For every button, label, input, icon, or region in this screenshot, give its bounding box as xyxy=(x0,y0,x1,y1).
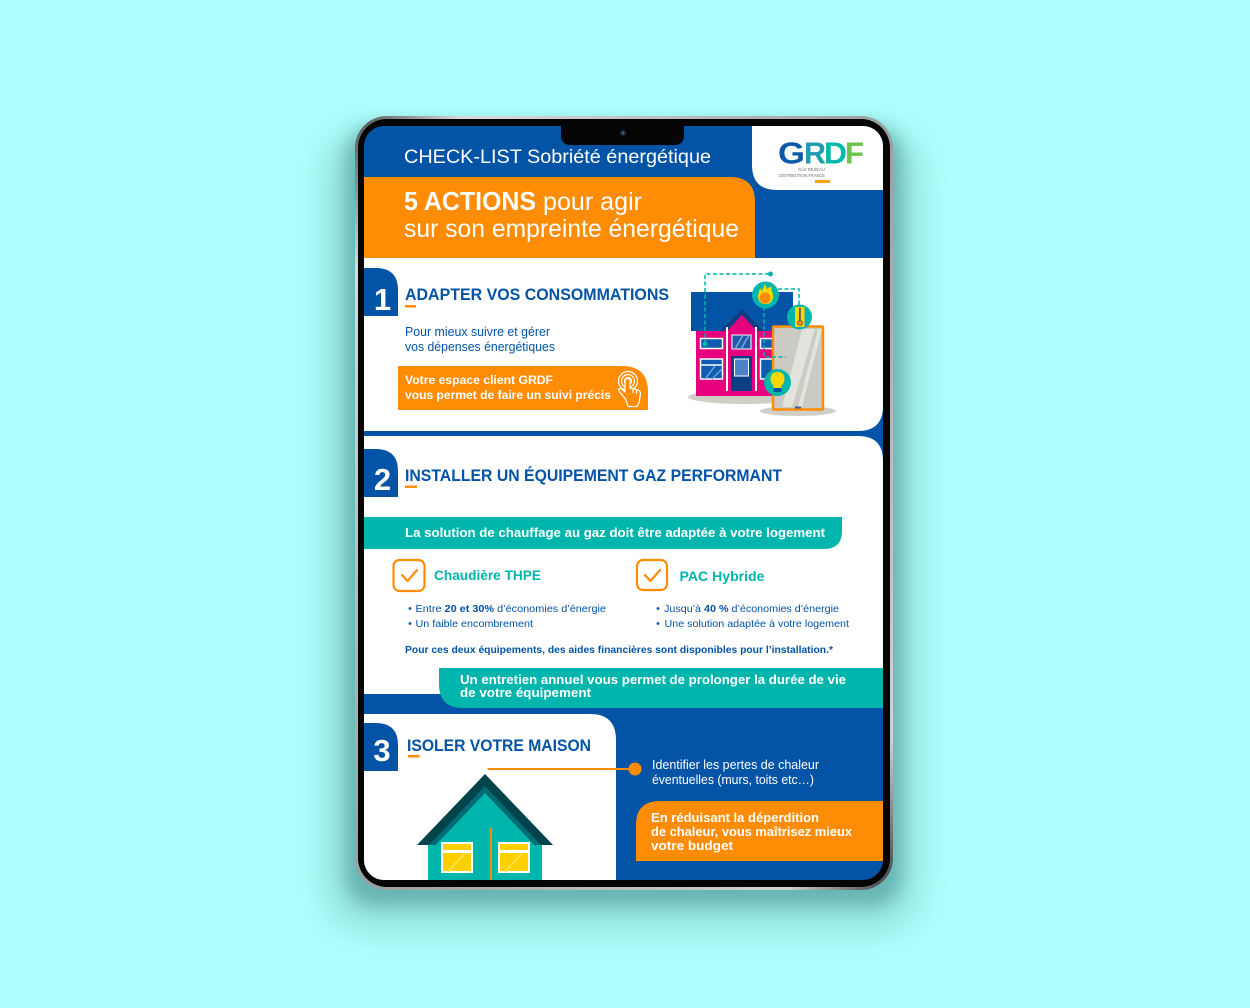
GRDF logo: DISTRIBUTION FRANCE xyxy=(779,173,825,178)
teal band xyxy=(364,517,842,549)
number tab 3 xyxy=(364,723,398,771)
GRDF logo: D xyxy=(824,136,847,170)
number tab 1: 1 xyxy=(374,282,391,317)
icon: check box xyxy=(394,560,424,591)
number tab 3: 3 xyxy=(373,733,391,768)
window left xyxy=(442,843,472,872)
GRDF logo: R xyxy=(804,136,826,170)
financial aid note: Pour ces deux équipements, des aides financières sont disponibles pour l’installation.* xyxy=(405,644,834,656)
section 2 xyxy=(364,436,883,708)
description 1: vos dépenses énergétiques xyxy=(405,340,555,354)
option: Chaudière THPE: Chaudière THPE xyxy=(434,567,541,583)
house xyxy=(691,292,793,396)
heading 3: ISOLER VOTRE MAISON xyxy=(407,737,591,755)
option: Chaudière THPE: Un faible encombrement xyxy=(416,618,533,630)
orange callout 3: En réduisant la déperdition xyxy=(651,810,819,825)
description 3 xyxy=(652,758,819,787)
GRDF logo: GAZ RÉSEAU xyxy=(798,166,825,172)
illustration: house xyxy=(417,774,553,880)
icon: light bulb xyxy=(764,369,791,396)
GRDF logo xyxy=(779,142,863,183)
screen content xyxy=(364,126,883,880)
teal maintenance callout: Un entretien annuel vous permet de prolonger la durée de vie xyxy=(460,672,846,687)
number tab 2 xyxy=(364,449,398,497)
logo panel xyxy=(752,126,883,190)
icon: thermometer xyxy=(787,304,812,330)
orange banner: 5 ACTIONS xyxy=(404,186,536,216)
description 1 xyxy=(405,325,555,354)
orange callout 1: vous permet de faire un suivi précis xyxy=(405,390,611,402)
connector lines xyxy=(705,274,799,357)
teal maintenance callout xyxy=(439,668,883,708)
orange banner xyxy=(364,177,755,258)
connector line xyxy=(488,762,642,776)
GRDF logo: G xyxy=(778,136,805,170)
description 3: Identifier les pertes de chaleur xyxy=(652,758,819,772)
device shadow xyxy=(330,125,915,925)
orange callout 3: votre budget xyxy=(651,838,734,853)
option: PAC Hybride: PAC Hybride xyxy=(680,568,765,584)
GRDF logo: F xyxy=(845,136,864,170)
orange banner: sur son empreinte énergétique xyxy=(404,215,739,243)
option: PAC Hybride xyxy=(637,560,849,630)
teal band: La solution de chauffage au gaz doit être adaptée à votre logement xyxy=(405,526,826,540)
option: PAC Hybride: Une solution adaptée à votre logement xyxy=(664,618,849,630)
section 1 xyxy=(364,258,883,431)
tablet frame xyxy=(355,116,893,890)
tablet device xyxy=(355,116,893,890)
orange callout 1: Votre espace client GRDF xyxy=(405,375,553,387)
number tab 2: 2 xyxy=(374,462,391,497)
tablet xyxy=(773,326,823,410)
teal maintenance callout: de votre équipement xyxy=(460,685,592,700)
heading 1: ADAPTER VOS CONSOMMATIONS xyxy=(405,286,669,304)
orange callout 3 xyxy=(636,801,883,861)
window right xyxy=(499,843,529,872)
icon: pointing hand xyxy=(618,372,640,406)
description 3: éventuelles (murs, toits etc…) xyxy=(652,773,814,787)
orange callout 1 xyxy=(398,366,648,410)
description 1: Pour mieux suivre et gérer xyxy=(405,325,550,339)
heading 2: INSTALLER UN ÉQUIPEMENT GAZ PERFORMANT xyxy=(405,466,782,485)
number tab 1 xyxy=(364,268,398,317)
header xyxy=(364,126,883,258)
white panel xyxy=(364,714,616,880)
screen blue base xyxy=(364,126,883,880)
option: PAC Hybride: Jusqu’à 40 % d’économies d’énergie xyxy=(664,603,839,615)
orange banner: pour agir xyxy=(543,188,642,216)
icon: flame xyxy=(752,282,779,308)
tablet shadow xyxy=(760,408,836,416)
illustration: house and tablet xyxy=(688,272,836,416)
header title: CHECK-LIST Sobriété énergétique xyxy=(404,147,711,168)
option: Chaudière THPE xyxy=(394,560,606,630)
section 3 xyxy=(364,714,883,880)
notch with camera xyxy=(561,124,684,145)
orange callout 3: de chaleur, vous maîtrisez mieux xyxy=(651,824,853,839)
icon: check box xyxy=(637,560,667,590)
option: Chaudière THPE: Entre 20 et 30% d’économies d’énergie xyxy=(416,603,606,615)
house shadow xyxy=(688,394,772,404)
tablet bezel xyxy=(358,119,890,887)
